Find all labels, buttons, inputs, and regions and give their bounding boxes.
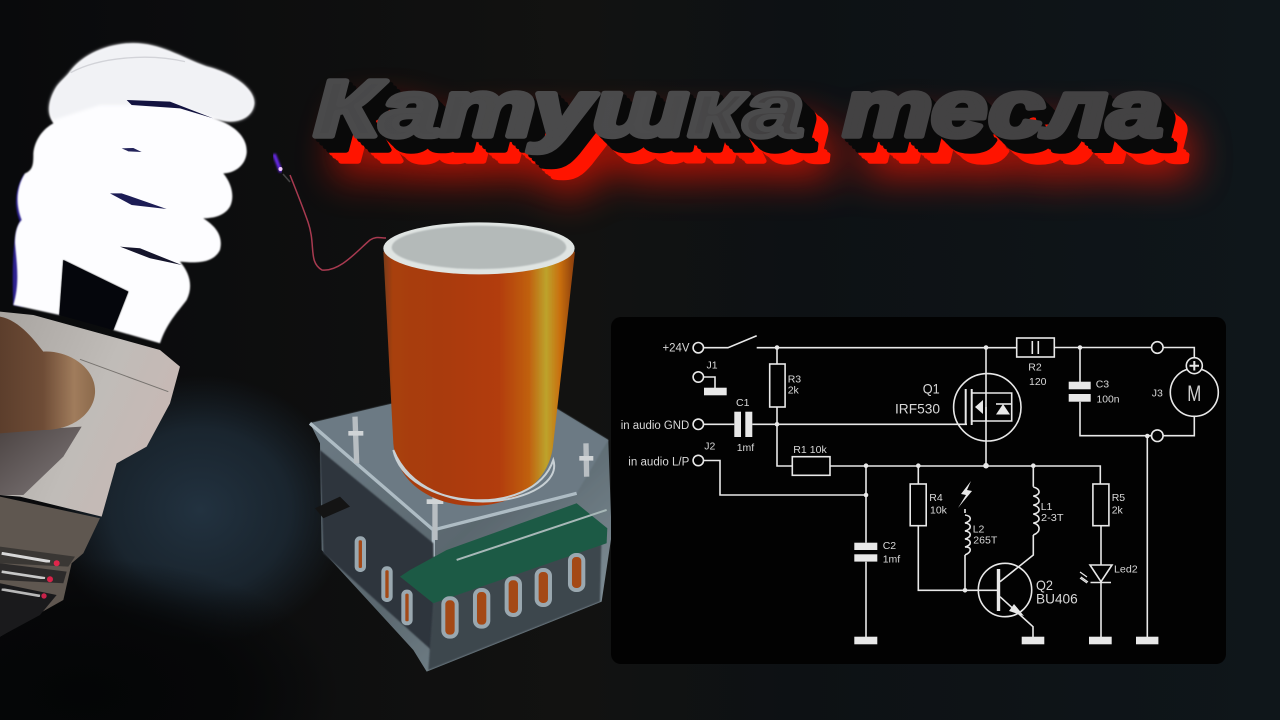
circuit labels: R1 10k bbox=[793, 444, 828, 456]
circuit labels: Q1 bbox=[923, 380, 940, 396]
circuit labels: C2 bbox=[883, 540, 896, 552]
bulb spiral tube bbox=[13, 43, 254, 343]
lightning bolt bbox=[958, 481, 972, 508]
circuit labels: BU406 bbox=[1036, 591, 1078, 607]
copper coil cylinder bbox=[383, 222, 575, 506]
circuit labels: 1mf bbox=[737, 442, 754, 454]
wires bbox=[704, 336, 1194, 637]
LED bbox=[1080, 565, 1112, 583]
transformer fins bbox=[357, 538, 583, 637]
thin wire with purple spark bbox=[274, 154, 386, 270]
circuit labels: 2-3T bbox=[1041, 512, 1064, 524]
screw thread bbox=[0, 497, 100, 637]
terminals bbox=[693, 342, 1163, 466]
transistor Q2 bbox=[978, 563, 1032, 617]
light bulb photo bbox=[0, 43, 254, 637]
tesla coil photo bbox=[310, 222, 612, 672]
screws and switch bbox=[355, 417, 587, 540]
title: тесла bbox=[843, 64, 1163, 153]
circuit labels: L2 bbox=[973, 523, 985, 535]
circuit labels: R5 bbox=[1112, 492, 1125, 504]
circuit labels: R4 bbox=[929, 492, 943, 504]
circuit labels: +24V bbox=[662, 342, 690, 354]
circuit labels: in audio L/P bbox=[628, 457, 690, 469]
circuit labels: C3 bbox=[1096, 379, 1109, 391]
circuit labels: 2k bbox=[1112, 505, 1124, 517]
circuit labels: 10k bbox=[930, 505, 948, 517]
circuit diagram panel bbox=[611, 317, 1226, 664]
title: Катушка bbox=[314, 64, 804, 153]
circuit labels: J2 bbox=[704, 440, 716, 452]
circuit labels: 100n bbox=[1096, 394, 1120, 406]
motor: M bbox=[1187, 381, 1201, 406]
circuit labels: R2 bbox=[1028, 362, 1042, 374]
circuit labels: 2k bbox=[788, 385, 800, 397]
circuit labels: Q2 bbox=[1036, 577, 1053, 593]
circuit labels: Led2 bbox=[1114, 563, 1138, 575]
junction dots bbox=[775, 345, 1150, 593]
transistor Q1 bbox=[954, 374, 1021, 441]
circuit labels: 1mf bbox=[883, 554, 900, 566]
acrylic base bbox=[310, 403, 612, 672]
circuit labels: R3 bbox=[788, 374, 801, 386]
circuit labels: 120 bbox=[1029, 376, 1047, 388]
motor bbox=[1170, 358, 1218, 416]
circuit labels: L1 bbox=[1041, 501, 1053, 513]
inductors bbox=[965, 487, 1039, 555]
circuit labels bbox=[621, 342, 1163, 607]
bulb base and hand bbox=[0, 312, 180, 637]
circuit labels: J1 bbox=[706, 359, 718, 371]
circuit labels: IRF530 bbox=[895, 401, 940, 417]
circuit labels: J3 bbox=[1152, 388, 1163, 400]
circuit labels: 265T bbox=[973, 535, 998, 547]
finger bbox=[0, 317, 95, 433]
capacitors and ground bars bbox=[704, 382, 1158, 644]
resistors bbox=[770, 338, 1109, 526]
circuit labels: C1 bbox=[736, 397, 750, 409]
green circuit board bbox=[400, 503, 607, 603]
circuit labels: in audio GND bbox=[621, 420, 689, 432]
title bbox=[314, 64, 1163, 153]
